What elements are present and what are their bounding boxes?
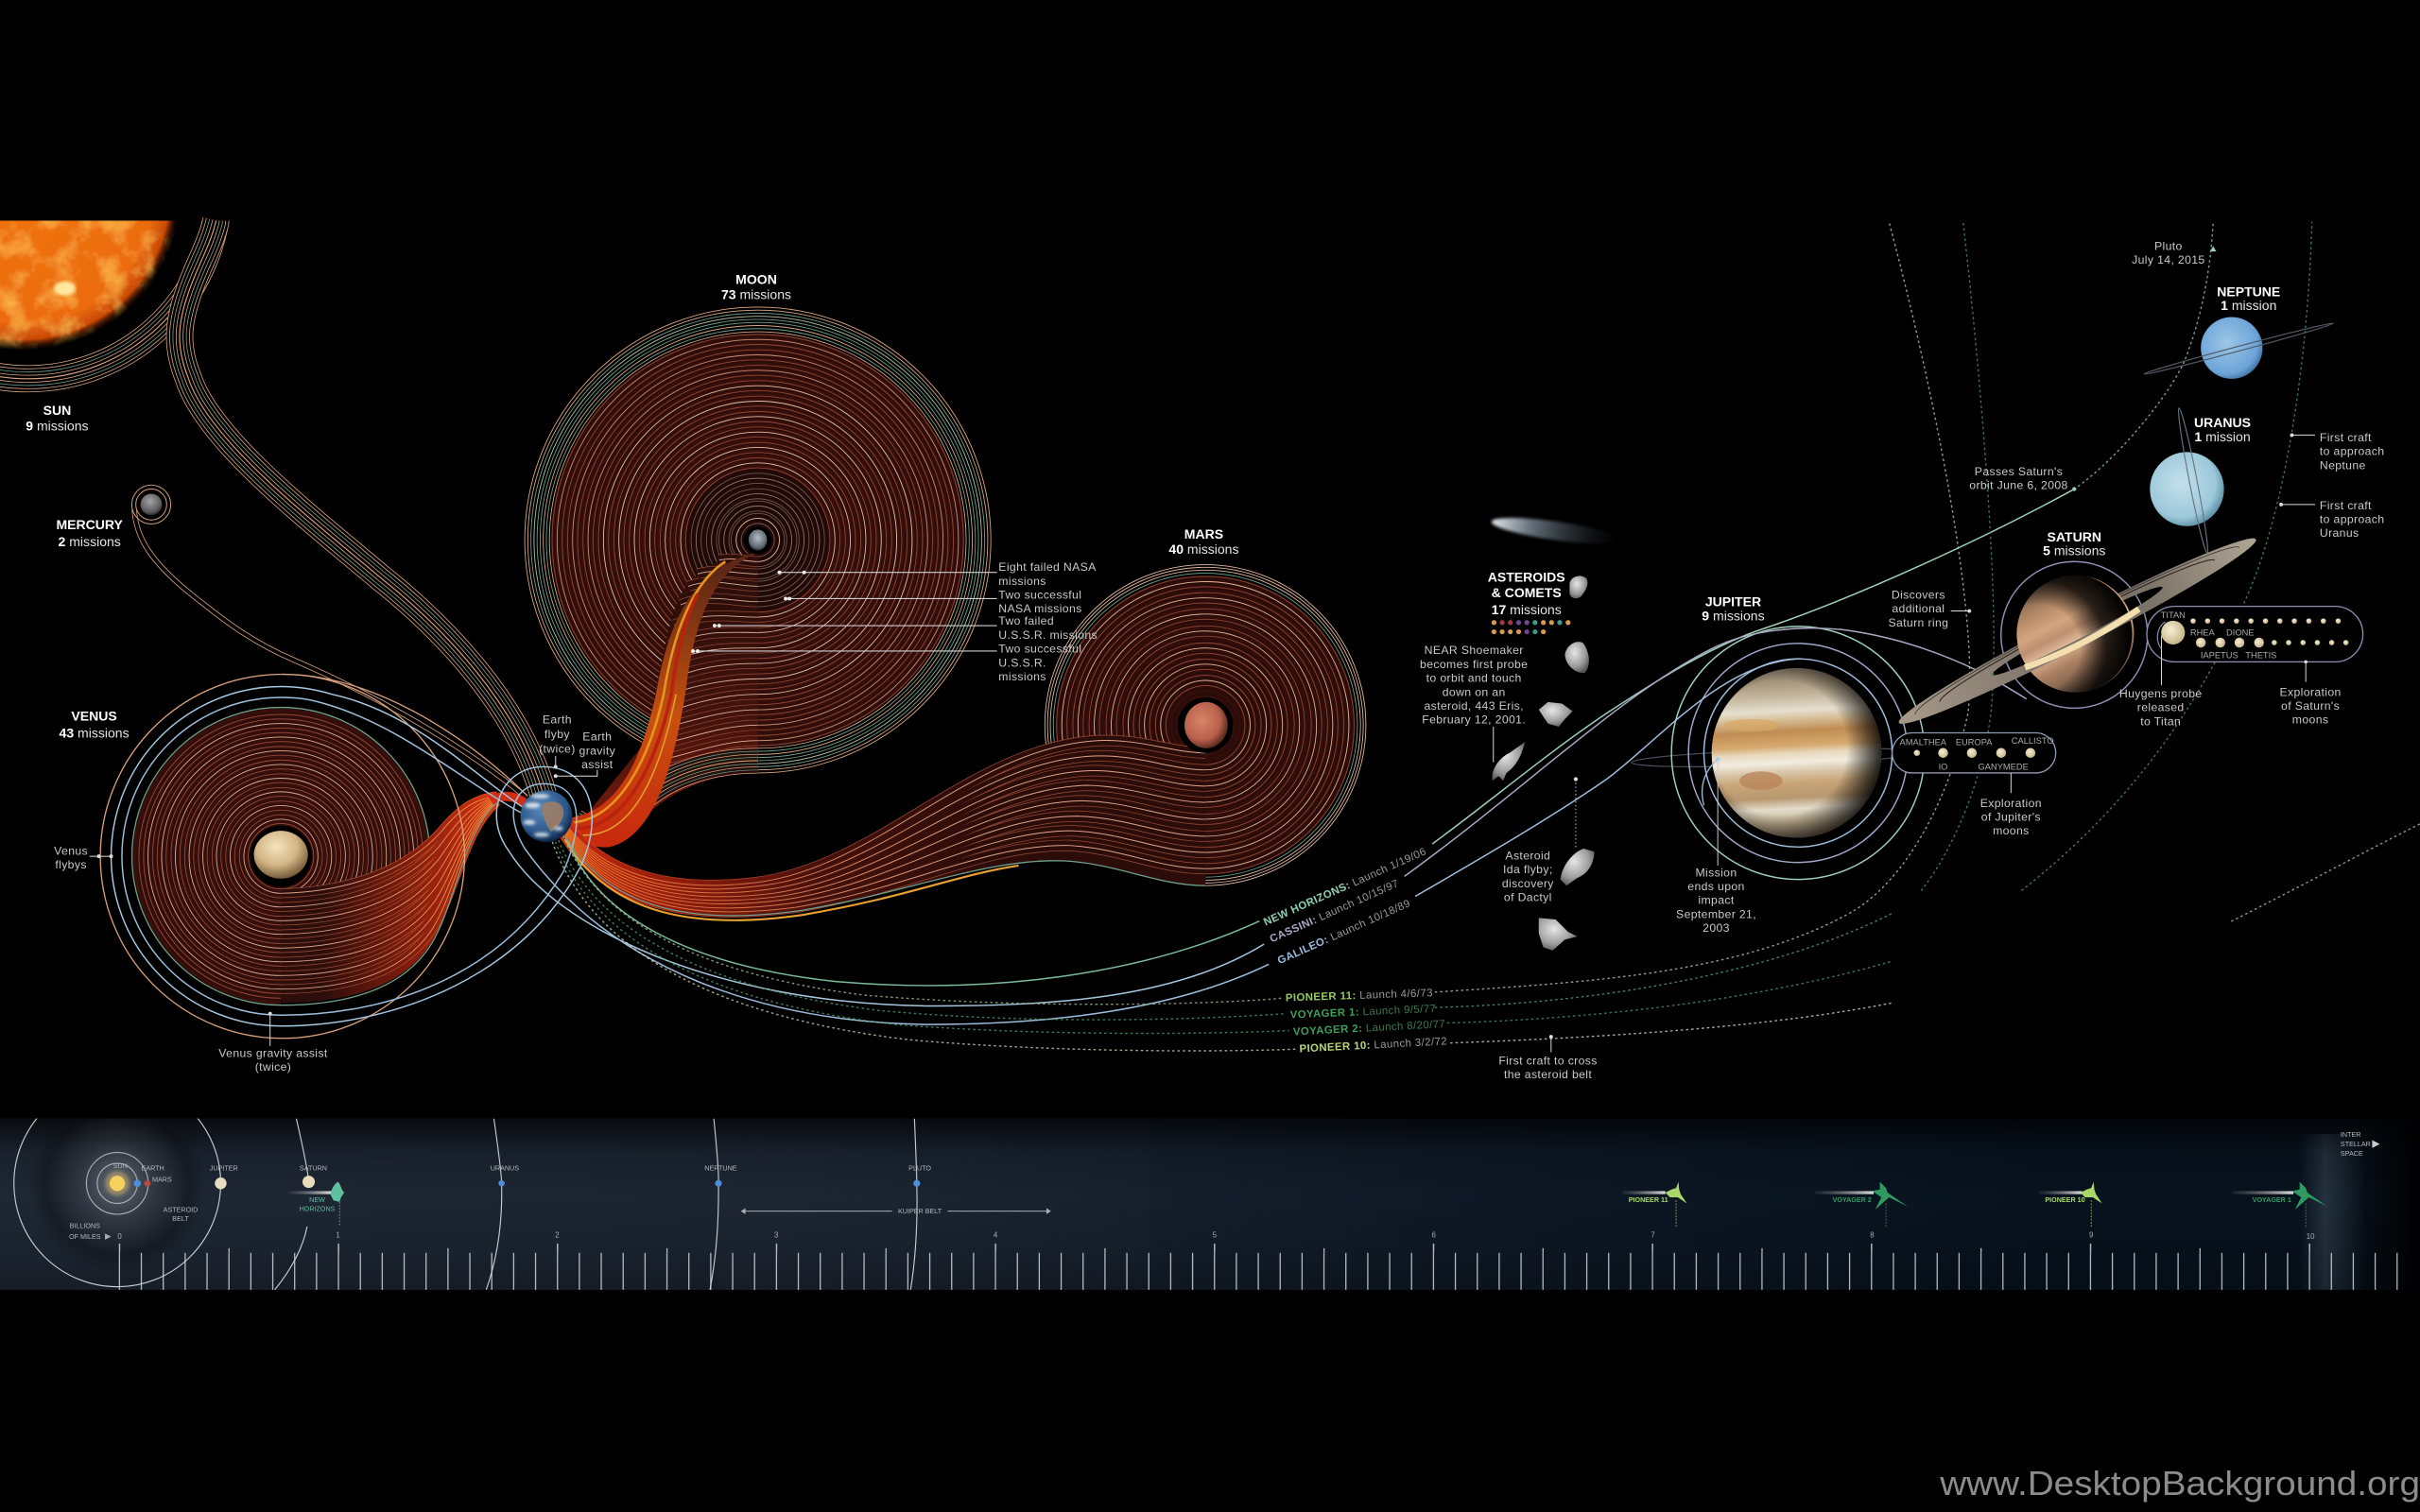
callout: Passes Saturn's orbit: orbit June 6, 2008: [1969, 479, 2068, 492]
label: Saturn missions: SATURN: [2048, 529, 2101, 544]
callout: Venus flybys: flybys: [55, 858, 87, 871]
timeline planet names: SUN: [113, 1162, 128, 1170]
icons: asteroids: [1493, 576, 1595, 951]
timeline numbers: 2: [555, 1230, 560, 1239]
label: Mercury missions: MERCURY: [56, 517, 123, 532]
callout: Asteroid Ida flyby: discovery: [1502, 877, 1554, 890]
callout: Exploration of Saturn's moons: [2279, 661, 2342, 727]
callout: first craft to cross the asteroid belt: [1498, 1035, 1598, 1081]
labels: spacecraft launches: [1262, 846, 1447, 1055]
Venus fan to Earth: [281, 796, 534, 1005]
icon: Saturn with rings: [1873, 489, 2283, 776]
label: Jupiter missions: 9 missions: [1702, 608, 1765, 623]
labels: spacecraft launches: GALILEO: Launch 10/18/89: [1276, 898, 1412, 967]
timeline numbers: 0: [117, 1232, 122, 1241]
icon: Sun: [0, 221, 177, 350]
Callout: Mission ends upon impact: Mission: [1696, 866, 1737, 879]
timeline numbers: 8: [1870, 1230, 1875, 1239]
labels: spacecraft launches: PIONEER 11: Launch 4/6/73: [1286, 988, 1433, 1005]
Kuiper belt span: [741, 1208, 1051, 1215]
Venus orbit rings: [132, 708, 430, 1005]
callout: Exploration of Saturn's moons: of Saturn's: [2281, 699, 2340, 713]
icon: Mars: [1178, 697, 1233, 753]
callout: First craft to approach Neptune: First craft: [2320, 431, 2372, 444]
callouts: Moon mission groups: missions: [998, 670, 1046, 683]
panel: Jupiter: [1632, 627, 1925, 935]
Moon fan lines: [574, 552, 758, 844]
callout: Pluto arrival: [2132, 239, 2216, 266]
callout: NEAR Shoemaker: to orbit and touch: [1426, 672, 1522, 685]
icon: Mercury: [141, 493, 162, 515]
labels: spacecraft launches: VOYAGER 2: Launch 8/20/77: [1293, 1019, 1445, 1039]
Mercury trajectories: [131, 485, 525, 796]
icon: Moon: [744, 526, 771, 554]
callout: Discovers additional Saturn ring: Saturn ring: [1888, 616, 1948, 629]
label: Mars missions: 40 missions: [1168, 541, 1239, 557]
label: interstellar space: INTER: [2341, 1131, 2360, 1139]
spacecraft: Voyager 2: [1815, 1182, 1908, 1227]
Callout: Mission ends upon impact: September 21,: [1676, 907, 1756, 920]
labels: spacecraft launches: VOYAGER 1: Launch 9/5/77: [1290, 1004, 1436, 1022]
panel: Moon: [525, 307, 991, 848]
callout: Exploration of Saturn's moons: Exploration: [2279, 685, 2342, 698]
trajectories: Venus flybys and outer loops: [100, 674, 1296, 1051]
label: Uranus missions: URANUS: [2194, 415, 2251, 430]
callout: Venus gravity assist: (twice): [255, 1060, 291, 1074]
Saturn moon names: TITAN: [2161, 610, 2186, 620]
Jupiter orbit rings: [1671, 627, 1925, 880]
Saturn moon dots: [2161, 618, 2348, 647]
Callout: Mission ends upon impact: [1676, 757, 1756, 935]
label: Venus missions: 43 missions: [60, 725, 130, 740]
callout: NEAR Shoemaker: [1420, 644, 1528, 763]
Jupiter thin ring: [1632, 745, 1919, 770]
timeline planet names: OF MILES: [69, 1233, 101, 1241]
Neptune ring: [2143, 321, 2334, 376]
Callout: Mission ends upon impact: impact: [1698, 894, 1735, 907]
timeline planet names: NEPTUNE: [704, 1164, 737, 1172]
callout: Passes Saturn's orbit: Passes Saturn's: [1975, 465, 2063, 478]
callout: Discovers additional Saturn ring: [1888, 588, 1971, 629]
callout: Exploration of Jupiter's moons: Exploration: [1980, 797, 2042, 810]
timeline ticks: [119, 1248, 2400, 1271]
timeline planet names: JUPITER: [210, 1164, 238, 1172]
label: Saturn missions: 5 missions: [2043, 543, 2105, 558]
icon: Venus: [250, 825, 312, 887]
label: Moon missions: MOON: [735, 271, 777, 286]
Saturn night-side shadow: [2014, 575, 2133, 694]
label: Neptune missions: 1 mission: [2221, 298, 2276, 313]
spacecraft: Pioneer 10: PIONEER 10: [2045, 1196, 2085, 1204]
callout: NEAR Shoemaker: asteroid, 443 Eris,: [1424, 699, 1524, 713]
callout: Passes Saturn's orbit: [1969, 465, 2076, 492]
callout: Earth gravity assist: Earth: [582, 730, 612, 744]
callout: First craft to approach Uranus: [2279, 499, 2384, 540]
Huygens probe callout: Huygens probe: [2119, 687, 2203, 700]
icon: Jupiter: [1711, 668, 1881, 837]
Mars fan to Earth: [565, 741, 1205, 920]
timeline planets: [105, 1171, 920, 1195]
label: asteroids and comets missions: ASTEROIDS: [1488, 570, 1565, 585]
spacecraft: Pioneer 10: [2039, 1182, 2102, 1227]
callout: First craft to approach Neptune: to approach: [2320, 445, 2384, 458]
Moon orbit rings: [525, 307, 991, 773]
spacecraft: Pioneer 11: [1622, 1182, 1686, 1227]
panel: Saturn: [1898, 539, 2256, 724]
Huygens probe callout: released: [2137, 701, 2185, 714]
Callout: Mission ends upon impact: ends upon: [1687, 880, 1745, 893]
timeline planet names: MARS: [152, 1177, 172, 1184]
panel: asteroids and comets: [1420, 512, 1621, 951]
panel: Mars: [565, 565, 1366, 920]
spacecraft: Voyager 2: VOYAGER 2: [1833, 1196, 1872, 1204]
Huygens probe callout: [2119, 622, 2203, 728]
Jupiter moon dots: [1913, 748, 2035, 758]
callouts: Moon mission groups: Two successful: [998, 643, 1081, 656]
label: asteroids and comets missions: 17 missions: [1492, 602, 1562, 617]
callout: Pluto arrival: Pluto: [2154, 239, 2183, 252]
callout: Venus flybys: [54, 844, 113, 871]
callouts: Moon mission groups: U.S.S.R.: [998, 656, 1046, 669]
callout: Venus flybys: Venus: [54, 844, 88, 857]
Jupiter moon names: EUROPA: [1956, 738, 1993, 747]
callout: first craft to cross the asteroid belt: the asteroid belt: [1504, 1068, 1592, 1081]
callout: Earth flyby: flyby: [544, 728, 570, 741]
icon: Uranus: [2150, 452, 2224, 526]
Saturn moon names: DIONE: [2226, 628, 2255, 638]
label: Sun missions: 9 missions: [26, 419, 89, 434]
timeline numbers: 1: [336, 1230, 340, 1239]
panel: Sun with mission rings: [0, 217, 556, 797]
callout: Discovers additional Saturn ring: additional: [1892, 602, 1945, 615]
callout: first craft to cross the asteroid belt: First craft to cross: [1498, 1055, 1598, 1068]
watermark: www.DesktopBackground.org: [1939, 1464, 2420, 1503]
legend: asteroid mission dots: [1492, 620, 1570, 634]
spacecraft: New Horizons: [288, 1182, 344, 1227]
labels: spacecraft launches: PIONEER 10: Launch 3/2/72: [1299, 1036, 1447, 1055]
callout: Earth flyby: Earth: [543, 713, 572, 727]
spacecraft: Pioneer 11: PIONEER 11: [1629, 1196, 1668, 1204]
timeline numbers: 5: [1213, 1230, 1218, 1239]
callout: Asteroid Ida flyby: Asteroid: [1505, 849, 1550, 862]
timeline orbits: [13, 1119, 918, 1290]
callout: Exploration of Jupiter's moons: moons: [1993, 824, 2030, 837]
callout: Earth gravity assist: gravity: [579, 744, 616, 757]
label: Uranus missions: 1 mission: [2194, 429, 2251, 444]
callouts: Moon mission groups: [691, 560, 1098, 683]
Kuiper belt span: KUIPER BELT: [898, 1208, 942, 1215]
icon: Earth: [521, 790, 572, 842]
callouts: Moon mission groups: U.S.S.R. missions: [998, 628, 1098, 642]
callouts: Moon mission groups: missions: [998, 575, 1046, 588]
panel: Saturn's moons: [2119, 607, 2363, 728]
timeline numbers: 3: [774, 1230, 779, 1239]
callout: Exploration of Jupiter's moons: [1980, 773, 2042, 837]
labels: spacecraft launches: CASSINI: Launch 10/15/97: [1269, 878, 1401, 945]
Jupiter moon names: GANYMEDE: [1979, 763, 2029, 772]
callouts: Moon mission groups: Eight failed NASA: [998, 560, 1097, 574]
timeline planet names: [69, 1162, 931, 1241]
callout: Earth gravity assist: assist: [581, 758, 614, 771]
callout: NEAR Shoemaker: February 12, 2001.: [1422, 713, 1526, 727]
timeline planet names: BELT: [172, 1215, 189, 1223]
Saturn moon names: THETIS: [2245, 650, 2276, 660]
callouts: Moon mission groups: NASA missions: [998, 602, 1082, 615]
Saturn orbit: [2001, 561, 2148, 708]
timeline numbers: [117, 1230, 2315, 1241]
callout: Earth flyby: (twice): [539, 743, 576, 756]
panel: Neptune: [2143, 318, 2334, 379]
callout: Venus gravity assist: Venus gravity assist: [218, 1046, 328, 1059]
timeline planet names: BILLIONS: [70, 1223, 100, 1230]
Uranus ring: [2175, 407, 2211, 554]
label: Sun missions: SUN: [43, 403, 71, 418]
Jupiter moon names: IO: [1939, 763, 1947, 772]
timeline planet names: URANUS: [491, 1164, 519, 1172]
callout: Discovers additional Saturn ring: Discovers: [1892, 588, 1945, 601]
label: interstellar space: STELLAR: [2341, 1141, 2371, 1148]
label: interstellar space: SPACE: [2341, 1150, 2363, 1158]
timeline numbers: 9: [2089, 1230, 2093, 1239]
timeline planet names: ASTEROID: [164, 1206, 198, 1213]
callout: First craft to approach Neptune: Neptune: [2320, 458, 2366, 472]
callout: First craft to approach Uranus: Uranus: [2320, 526, 2359, 540]
label: asteroids and comets missions: & COMETS: [1492, 585, 1562, 600]
callout: Asteroid Ida flyby: Ida flyby;: [1503, 863, 1553, 876]
timeline background: [0, 1119, 2400, 1290]
spacecraft: New Horizons: NEW: [309, 1196, 325, 1204]
timeline planet names: PLUTO: [908, 1164, 931, 1172]
panel: Venus: [132, 708, 534, 1005]
callout: First craft to approach Uranus: First craft: [2320, 499, 2372, 512]
label: Neptune missions: NEPTUNE: [2217, 284, 2280, 299]
spacecraft: New Horizons: HORIZONS: [300, 1206, 336, 1213]
timeline numbers: 7: [1651, 1230, 1655, 1239]
timeline planet names: SATURN: [300, 1164, 327, 1172]
callout: Pluto arrival: July 14, 2015: [2132, 253, 2205, 266]
icon: comet: [1490, 512, 1621, 549]
callout: Exploration of Jupiter's moons: of Jupiter's: [1981, 811, 2041, 824]
timeline numbers: 10: [2307, 1232, 2315, 1241]
callout: First craft to approach Uranus: to approach: [2320, 512, 2384, 525]
callout: First craft to approach Neptune: [2290, 431, 2384, 472]
Jupiter moon names: [1900, 736, 2054, 772]
callout: Exploration of Saturn's moons: moons: [2292, 713, 2328, 727]
callout: NEAR Shoemaker: becomes first probe: [1420, 658, 1528, 671]
panel: Uranus: [2150, 407, 2224, 554]
callouts: Moon mission groups: Two failed: [998, 614, 1054, 627]
Saturn moon names: RHEA: [2190, 628, 2216, 638]
Mars orbit rings: [1045, 565, 1366, 885]
trajectories: outer planets: [1405, 222, 2420, 1043]
spacecraft: Voyager 1: VOYAGER 1: [2253, 1196, 2291, 1204]
Jupiter moon names: AMALTHEA: [1900, 738, 1947, 747]
label: Venus missions: VENUS: [71, 708, 117, 723]
Huygens probe callout: to Titan: [2140, 714, 2181, 728]
Sun mission rings and band to Earth: [0, 217, 556, 797]
Saturn front ring: [1898, 539, 2256, 724]
label: Jupiter missions: JUPITER: [1705, 594, 1761, 610]
panel: Jupiter's moons: [1893, 733, 2056, 837]
callout: Earth flyby: [539, 713, 576, 768]
label: Moon missions: 73 missions: [721, 287, 791, 302]
callout: NEAR Shoemaker: NEAR Shoemaker: [1425, 644, 1524, 657]
panel: Mercury: [131, 485, 525, 796]
Jupiter moon names: CALLISTO: [2012, 736, 2054, 746]
panel: distance timeline: [0, 1119, 2400, 1290]
timeline numbers: 6: [1432, 1230, 1437, 1239]
callout: Venus gravity assist: [218, 1012, 328, 1074]
Callout: Mission ends upon impact: 2003: [1703, 921, 1730, 935]
Saturn moon names: [2161, 610, 2276, 660]
timeline planet names: EARTH: [142, 1164, 164, 1172]
callout: Earth gravity assist: [554, 730, 616, 778]
Saturn moon names: IAPETUS: [2201, 650, 2238, 660]
label: interstellar space: [2341, 1131, 2380, 1158]
callout: Asteroid Ida flyby: [1502, 777, 1578, 903]
label: Mercury missions: 2 missions: [59, 534, 121, 549]
Moon tail to Earth: [571, 552, 758, 848]
callouts: Moon mission groups: Two successful: [998, 588, 1081, 601]
labels: spacecraft launches: NEW HORIZONS: Launch 1/19/06: [1262, 846, 1428, 928]
callout: NEAR Shoemaker: down on an: [1443, 685, 1506, 698]
spacecraft: Voyager 1: [2232, 1182, 2327, 1227]
icon: Neptune: [2201, 318, 2262, 379]
timeline numbers: 4: [994, 1230, 998, 1239]
label: Mars missions: MARS: [1184, 526, 1223, 541]
callout: Asteroid Ida flyby: of Dactyl: [1504, 890, 1552, 903]
